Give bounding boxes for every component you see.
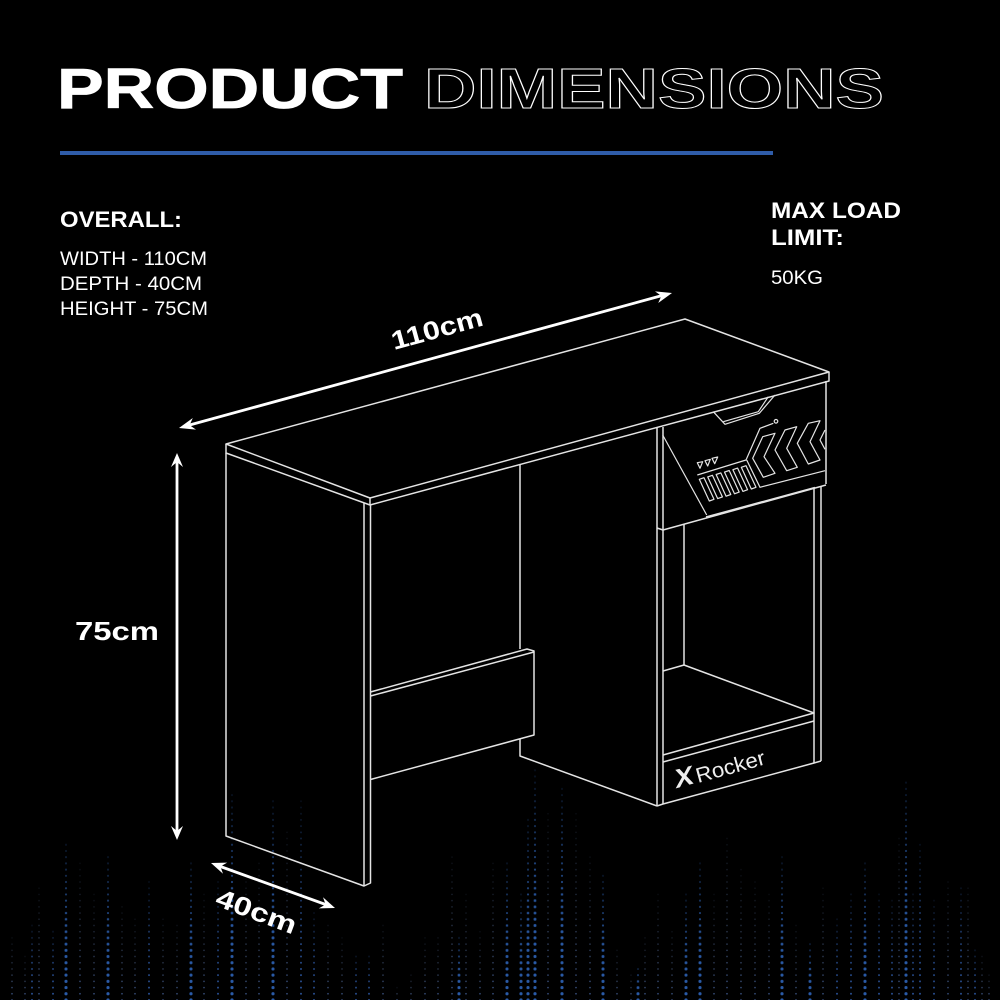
left side panel: [226, 453, 370, 886]
back edge lower and pedestal side: [520, 739, 657, 806]
blue divider line: [60, 151, 773, 155]
arrow: 110cm width: [179, 291, 672, 430]
vent slot 1: [699, 478, 714, 501]
height spec: HEIGHT - 75CM: [60, 299, 208, 320]
depth spec: DEPTH - 40CM: [60, 274, 202, 295]
pedestal shelf: [663, 665, 814, 755]
drawer bottom shadow edge: [706, 488, 815, 517]
label: 40cm: 40cm: [212, 883, 301, 940]
label: 110cm: 110cm: [388, 302, 486, 356]
pedestal outer left post: [656, 428, 658, 806]
arrow: 75cm height: [171, 453, 183, 840]
chevron 1: [753, 433, 775, 477]
back edge upper: [519, 465, 521, 649]
drawer bottom edge: [657, 485, 826, 530]
title: dimensions (outlined): DIMENSIONS: [424, 57, 884, 121]
drawer handle inner: [723, 397, 768, 422]
title: [57, 57, 884, 121]
chevron 3: [797, 421, 820, 464]
width spec: WIDTH - 110CM: [60, 249, 207, 270]
circuit end dot: [774, 420, 778, 423]
title: product: PRODUCT: [57, 57, 403, 121]
modesty panel: [370, 649, 534, 780]
drawer diagonal line: [663, 435, 707, 515]
arrow: 40cm depth: [211, 863, 335, 908]
chevron 4 partial: [820, 430, 825, 449]
logo: X Rocker: [669, 747, 768, 794]
pedestal back post: [683, 524, 685, 665]
plinth bottom line: [657, 761, 821, 806]
left panel inner edge: [363, 503, 365, 886]
triangle mark 3: [712, 457, 718, 464]
overall dimensions text block: [60, 207, 208, 320]
drawer graphic: [663, 395, 825, 515]
circuit line: [697, 423, 773, 475]
pedestal right posts: [813, 488, 815, 763]
vent slot 3: [716, 473, 731, 496]
vent slot 2: [708, 475, 722, 499]
drawer right edge: [825, 381, 827, 484]
chevron 2: [775, 427, 797, 471]
desktop front edge: [226, 372, 829, 505]
pedestal outer right post: [820, 486, 822, 761]
label: 75cm: 75cm: [75, 616, 159, 646]
triangle mark 1: [697, 462, 703, 468]
vent slot 6: [741, 466, 756, 489]
overall heading: OVERALL:: [60, 207, 182, 232]
desktop surface: [226, 319, 829, 498]
vent slot 5: [733, 468, 748, 491]
modesty panel top edge: [370, 652, 534, 696]
max load text block: [771, 198, 901, 289]
drawer handle: [713, 395, 775, 424]
lower accent line: [747, 460, 825, 487]
logo wordmark: Rocker: [693, 747, 768, 788]
desktop corner edge: [369, 498, 371, 505]
logo X mark: X: [669, 759, 699, 794]
triangle mark 2: [705, 459, 710, 466]
vent slot 4: [724, 470, 739, 494]
max load value: 50KG: [771, 268, 823, 289]
pedestal inner left post: [662, 427, 664, 804]
plinth top line: [663, 721, 814, 762]
max load heading line 1: MAX LOAD: [771, 198, 901, 223]
desk line drawing: [226, 319, 829, 886]
max load heading line 2: LIMIT:: [771, 225, 844, 250]
